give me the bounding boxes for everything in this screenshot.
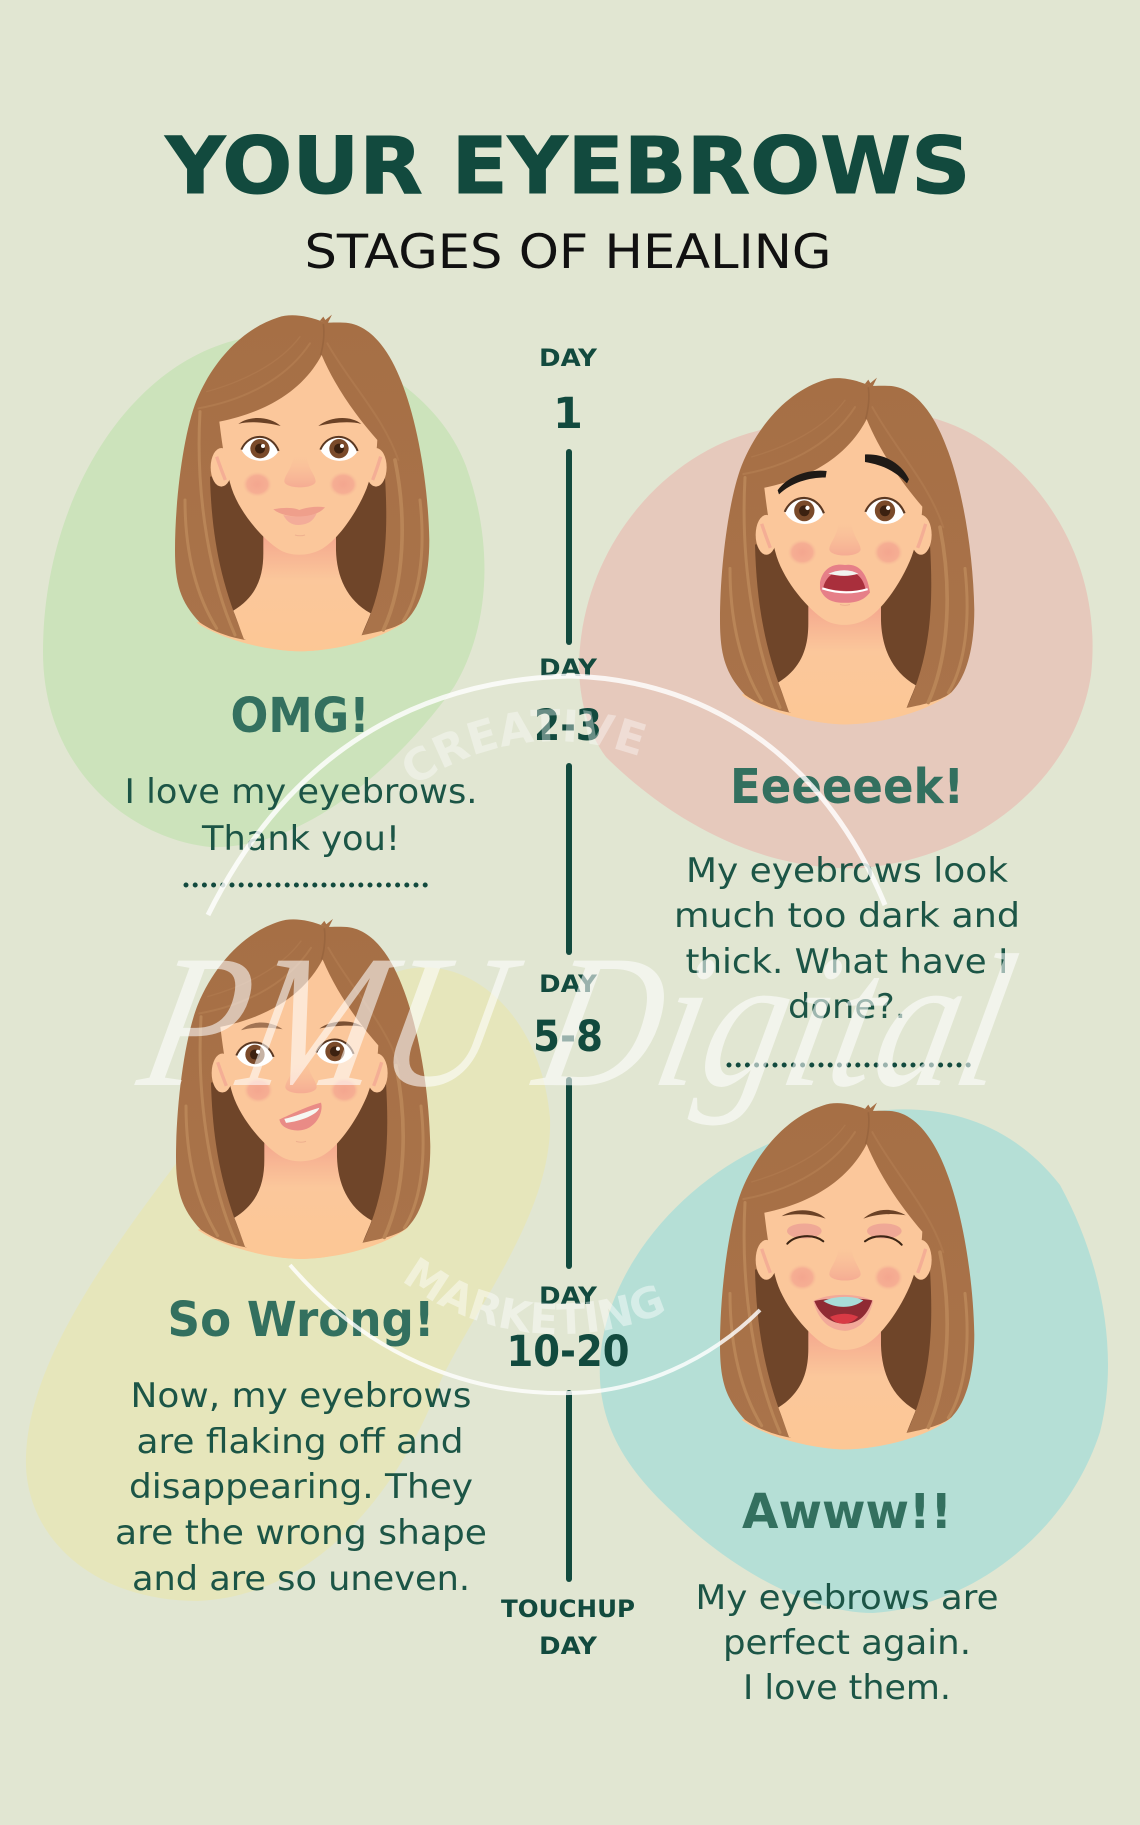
- day 2-3 marker: DAY: [539, 654, 598, 682]
- text: day 2-3: much too dark and: [674, 896, 1020, 936]
- face: happy: [175, 315, 429, 651]
- touchup day marker: DAY: [539, 1632, 598, 1660]
- watermark: [124, 674, 1031, 1396]
- touchup day marker: [501, 1595, 635, 1660]
- blob: pink: [579, 410, 1093, 868]
- segment 4: [566, 1393, 572, 1579]
- heading: Eeeeeek: Eeeeeek!: [730, 759, 964, 815]
- text: day 10-20: perfect again.: [723, 1623, 971, 1663]
- day 5-8 marker: 5-8: [533, 1012, 603, 1062]
- blob: green: [43, 336, 484, 847]
- segment 1: [566, 452, 572, 642]
- subtitle: STAGES OF HEALING: [304, 225, 832, 280]
- text: day 2-3: done?.: [788, 987, 906, 1027]
- text: day 1: Thank you!: [201, 819, 400, 859]
- text: day 2-3: [674, 851, 1020, 1027]
- text: day 10-20: My eyebrows are: [696, 1578, 998, 1618]
- day 10-20 marker: 10-20: [506, 1327, 630, 1377]
- text: day 5-8: are flaking off and: [136, 1422, 464, 1462]
- watermark script: PMU Digital: [124, 916, 1031, 1127]
- text: day 2-3: My eyebrows look: [686, 851, 1008, 891]
- text: day 5-8: Now, my eyebrows: [130, 1376, 472, 1416]
- text: day 1: [124, 772, 477, 859]
- face: shocked: [720, 378, 974, 724]
- dotted divider left: [186, 882, 428, 888]
- watermark bottom word: MARKETING: [404, 1257, 664, 1334]
- day 1 marker: 1: [553, 389, 583, 439]
- text: day 5-8: [115, 1376, 487, 1599]
- heading: OMG: OMG!: [230, 688, 370, 744]
- text: day 10-20: I love them.: [743, 1668, 951, 1708]
- text: day 5-8: are the wrong shape: [115, 1513, 487, 1553]
- dotted divider right: [729, 1062, 972, 1068]
- segment 3: [566, 1080, 572, 1266]
- timeline: [501, 344, 635, 1660]
- text: day 10-20: [696, 1578, 998, 1708]
- face: worried: [176, 919, 430, 1259]
- day 2-3 marker: 2-3: [534, 701, 602, 751]
- face: laughing: [720, 1103, 974, 1449]
- day 5-8 marker: [533, 970, 603, 1062]
- title: YOUR EYEBROWS: [164, 122, 970, 212]
- day 2-3 marker: [534, 654, 602, 751]
- day 10-20 marker: [506, 1282, 630, 1377]
- day 10-20 marker: DAY: [539, 1282, 598, 1310]
- text: day 5-8: and are so uneven.: [132, 1559, 470, 1599]
- blob: yellow: [26, 967, 550, 1601]
- heading: So Wrong: So Wrong!: [168, 1292, 434, 1348]
- touchup day marker: TOUCHUP: [501, 1595, 635, 1623]
- blob: teal: [600, 1109, 1108, 1613]
- segment 2: [566, 766, 572, 952]
- text: day 2-3: thick. What have I: [686, 942, 1008, 982]
- day 1 marker: DAY: [539, 344, 598, 372]
- heading: Awww: Awww!!: [742, 1484, 952, 1540]
- watermark top word: CREATIVE: [404, 709, 646, 780]
- text: day 5-8: disappearing. They: [129, 1467, 473, 1507]
- day 1 marker: [539, 344, 598, 439]
- text: day 1: I love my eyebrows.: [124, 772, 477, 812]
- day 5-8 marker: DAY: [539, 970, 598, 998]
